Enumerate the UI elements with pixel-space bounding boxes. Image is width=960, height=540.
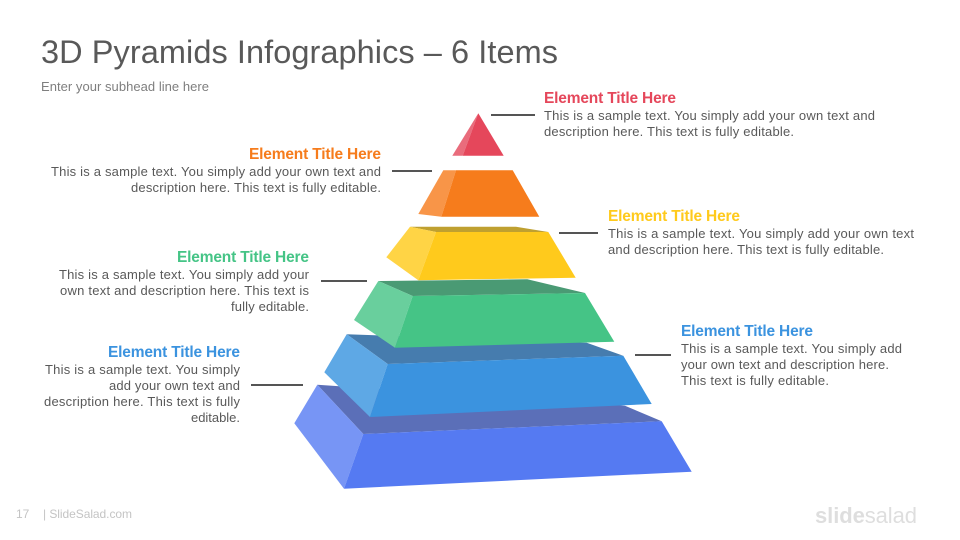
callout: yellow: This is a sample text. You simply add your own text [608,226,914,241]
callout: blue: Element Title Here [681,323,813,340]
tier 1: red [452,113,504,156]
tier 4: green [354,279,614,348]
callout: orange [51,146,432,195]
callout: yellow: and description here. This text is fully editable. [608,242,884,257]
footer: site name: | SlideSalad.com [43,507,132,521]
callout: orange: This is a sample text. You simply add your own text and [51,164,381,179]
callout: blue: your own text and description here. [681,357,889,372]
callout: green: Element Title Here [177,249,309,266]
subhead: Enter your subhead line here [41,79,209,94]
callout: green: own text and description here. This text is [60,283,310,298]
title: 3D Pyramids Infographics – 6 Items [41,34,558,70]
callout: orange: Element Title Here [249,146,381,163]
tier 6: base blue [294,385,692,489]
callout: yellow: Element Title Here [608,208,740,225]
callout: base blue: add your own text and [109,378,240,393]
callout: blue: This is a sample text. You simply add [681,341,902,356]
callout: green [59,249,367,314]
callout: base blue: editable. [191,410,240,425]
logo: slidesalad [815,503,917,528]
callout: base blue [44,344,303,425]
callout: base blue: description here. This text is fully [44,394,240,409]
callout: green: This is a sample text. You simply add your [59,267,310,282]
footer: page number: 17 [16,507,30,521]
callout: red: description here. This text is fully editable. [544,124,794,139]
callout: yellow [559,208,914,257]
callout: red: This is a sample text. You simply add your own text and [544,108,875,123]
callout: green: fully editable. [231,299,309,314]
callout: blue: This text is fully editable. [681,373,829,388]
tier 2: orange [418,170,539,217]
tier 5: blue [324,334,652,417]
callout: base blue: Element Title Here [108,344,240,361]
callout: base blue: This is a sample text. You simply [45,362,240,377]
pyramid [294,113,692,489]
callout: red: Element Title Here [544,90,676,107]
tier 3: yellow [386,227,576,280]
callout: blue [635,323,902,388]
callout: red [491,90,875,139]
callout: orange: description here. This text is fully editable. [131,180,381,195]
